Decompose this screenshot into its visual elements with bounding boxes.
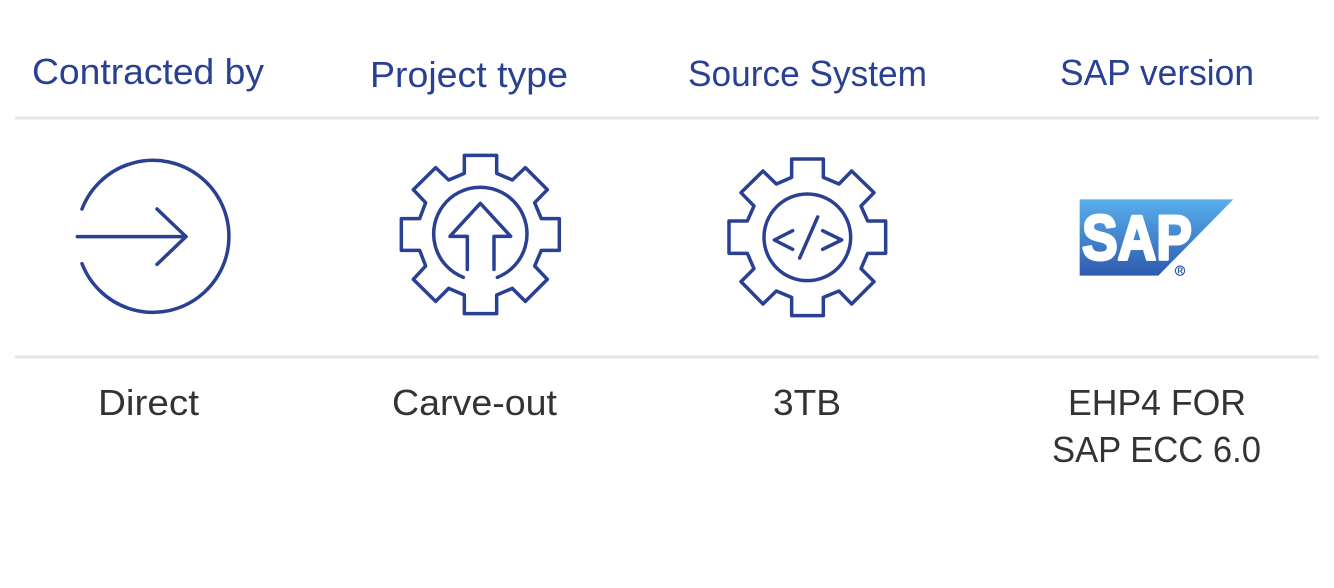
value: EHP4 FOR SAP ECC 6.0 xyxy=(1052,382,1261,470)
heading: Source System: Source System xyxy=(688,53,927,94)
value: EHP4 FOR SAP ECC 6.0: SAP ECC 6.0 xyxy=(1052,429,1261,470)
icon: gear with code brackets xyxy=(729,159,886,316)
value: 3TB: 3TB xyxy=(773,382,841,423)
value: Carve-out: Carve-out xyxy=(392,382,557,423)
icon: circle with entry arrow xyxy=(77,160,229,312)
heading: SAP version: SAP version xyxy=(1060,52,1254,93)
value: Direct: Direct xyxy=(98,382,199,423)
heading: Project type: Project type xyxy=(370,54,568,95)
icon: gear with up arrow xyxy=(401,155,559,314)
value: EHP4 FOR SAP ECC 6.0: EHP4 FOR xyxy=(1068,382,1246,423)
icon: SAP logo: R xyxy=(1177,267,1183,276)
icon: SAP logo: SAP xyxy=(1082,204,1192,274)
heading: Contracted by: Contracted by xyxy=(32,51,264,92)
